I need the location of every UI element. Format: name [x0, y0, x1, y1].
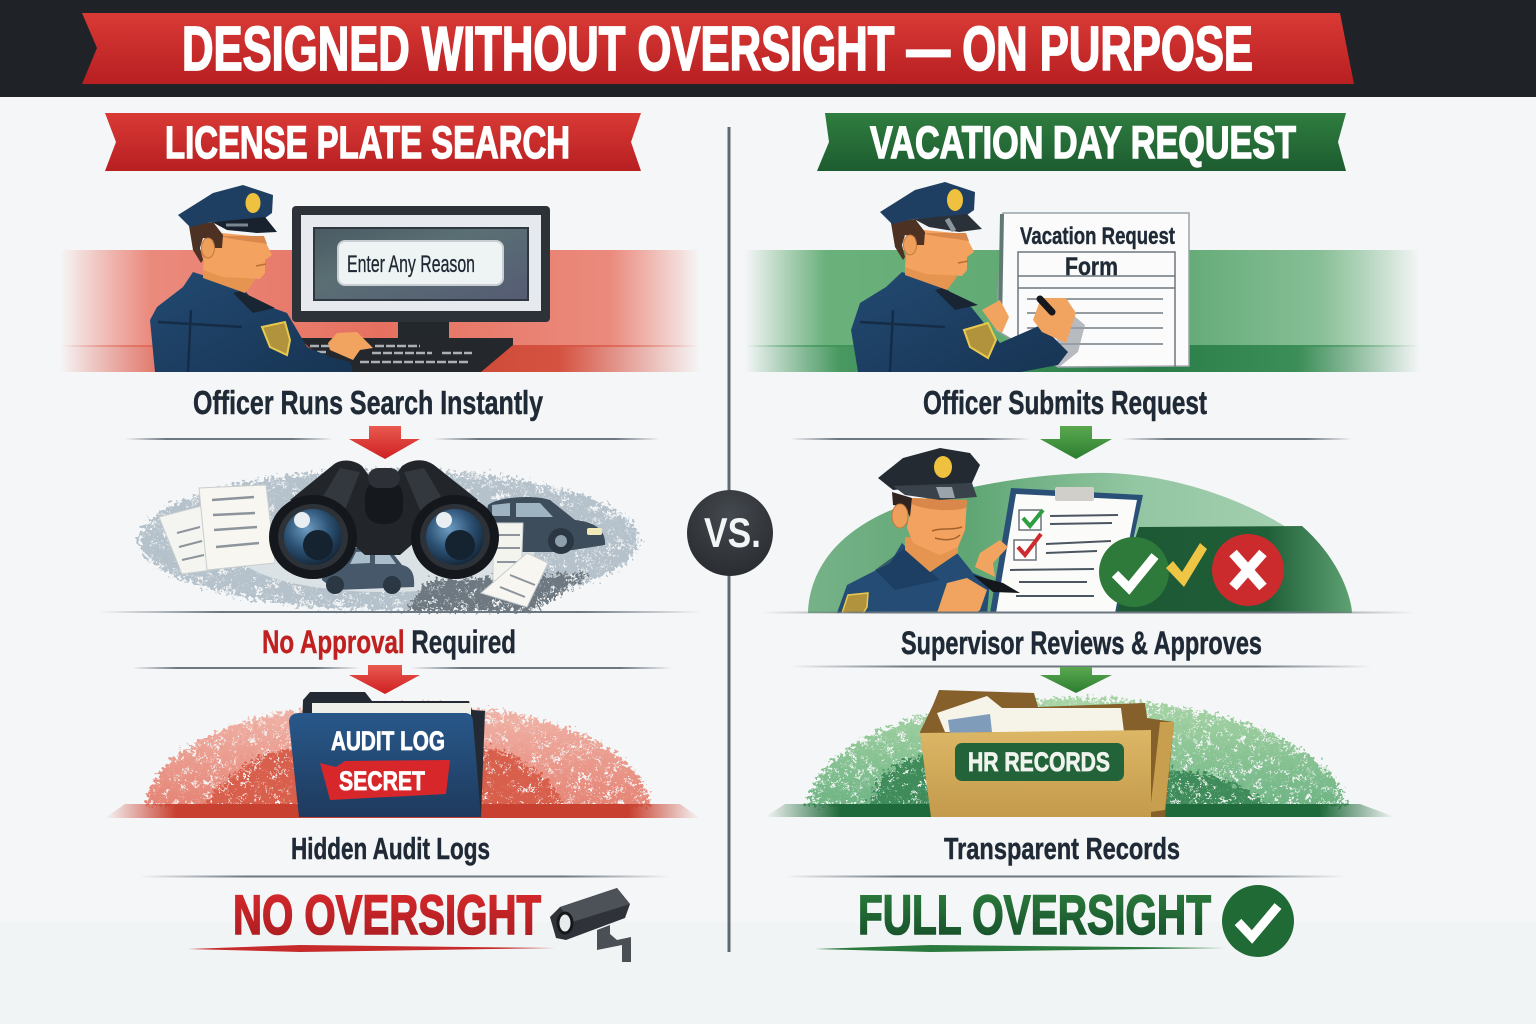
icon: yellow check [1166, 543, 1207, 587]
divider [785, 876, 1345, 878]
illustration: transparent records [765, 690, 1395, 817]
label: no approval required: No Approval Required [262, 624, 516, 660]
illustration: supervisor review [808, 448, 1352, 615]
icon: HR records folder: HR RECORDS [968, 747, 1110, 777]
road [405, 573, 590, 611]
verdict: no oversight [188, 883, 555, 952]
divider line [760, 612, 1415, 614]
icon: clipboard checklist [990, 487, 1143, 613]
band: green backdrop [745, 250, 1420, 372]
illustration: surveillance scene [139, 460, 639, 611]
car small [322, 547, 414, 594]
label: supervisor reviews and approves: Supervisor Reviews & Approves [901, 625, 1262, 661]
icon: binoculars [269, 460, 499, 579]
divider line [100, 611, 700, 613]
label: officer runs search instantly: Officer Runs Search Instantly [193, 384, 543, 421]
head [880, 182, 982, 290]
badge: VS. [687, 490, 773, 576]
icon: vacation request form [996, 213, 1189, 382]
center divider [728, 127, 730, 952]
icon: folder with secret stamp: AUDIT LOG [331, 726, 445, 756]
documents left [159, 485, 275, 574]
icon: supervisor officer [837, 448, 1020, 615]
head [178, 185, 277, 293]
heading: vacation day request: VACATION DAY REQUEST [870, 117, 1296, 168]
divider [140, 876, 670, 878]
panel: license plate search [60, 113, 700, 962]
band: red backdrop [60, 250, 700, 372]
icon: officer at computer [150, 185, 373, 372]
divider with arrow [790, 426, 1352, 459]
label: officer submits request: Officer Submits Request [923, 384, 1207, 421]
illustration: hidden audit logs [105, 692, 700, 818]
icon: red x [1212, 534, 1284, 606]
icon: oversight check badge [1222, 885, 1294, 957]
icon: folder with secret stamp [289, 692, 485, 817]
divider with arrow [790, 666, 1372, 693]
icon: keyboard [298, 338, 513, 372]
icon: security camera [550, 888, 631, 962]
dark green backdrop [1110, 526, 1352, 613]
title banner [0, 0, 1536, 97]
documents right [481, 523, 548, 607]
icon: vacation request form: Form [1065, 253, 1118, 281]
icon: green check [1099, 537, 1169, 607]
heading: license plate search: LICENSE PLATE SEARCH [165, 117, 570, 168]
verdict: full oversight [815, 883, 1225, 952]
divider with arrow [125, 426, 660, 459]
label: transparent records: Transparent Records [944, 831, 1180, 866]
icon: computer monitor with reason prompt: Enter Any Reason [347, 251, 475, 278]
icon: officer writing on form [851, 182, 1085, 372]
badge: VS.: VS. [704, 509, 761, 556]
heading: vacation day request [817, 113, 1346, 171]
car right [481, 497, 605, 554]
icon: folder with secret stamp: SECRET [339, 766, 425, 796]
icon: HR records folder [920, 690, 1174, 817]
verdict: full oversight: FULL OVERSIGHT [858, 883, 1211, 946]
heading: license plate search [105, 113, 641, 171]
icon: computer monitor with reason prompt [292, 206, 550, 344]
panel: vacation day request [745, 113, 1420, 957]
label: hidden audit logs: Hidden Audit Logs [291, 831, 490, 866]
verdict: no oversight: NO OVERSIGHT [233, 883, 541, 946]
icon: vacation request form: Vacation Request [1020, 223, 1175, 250]
divider with arrow [132, 665, 672, 694]
